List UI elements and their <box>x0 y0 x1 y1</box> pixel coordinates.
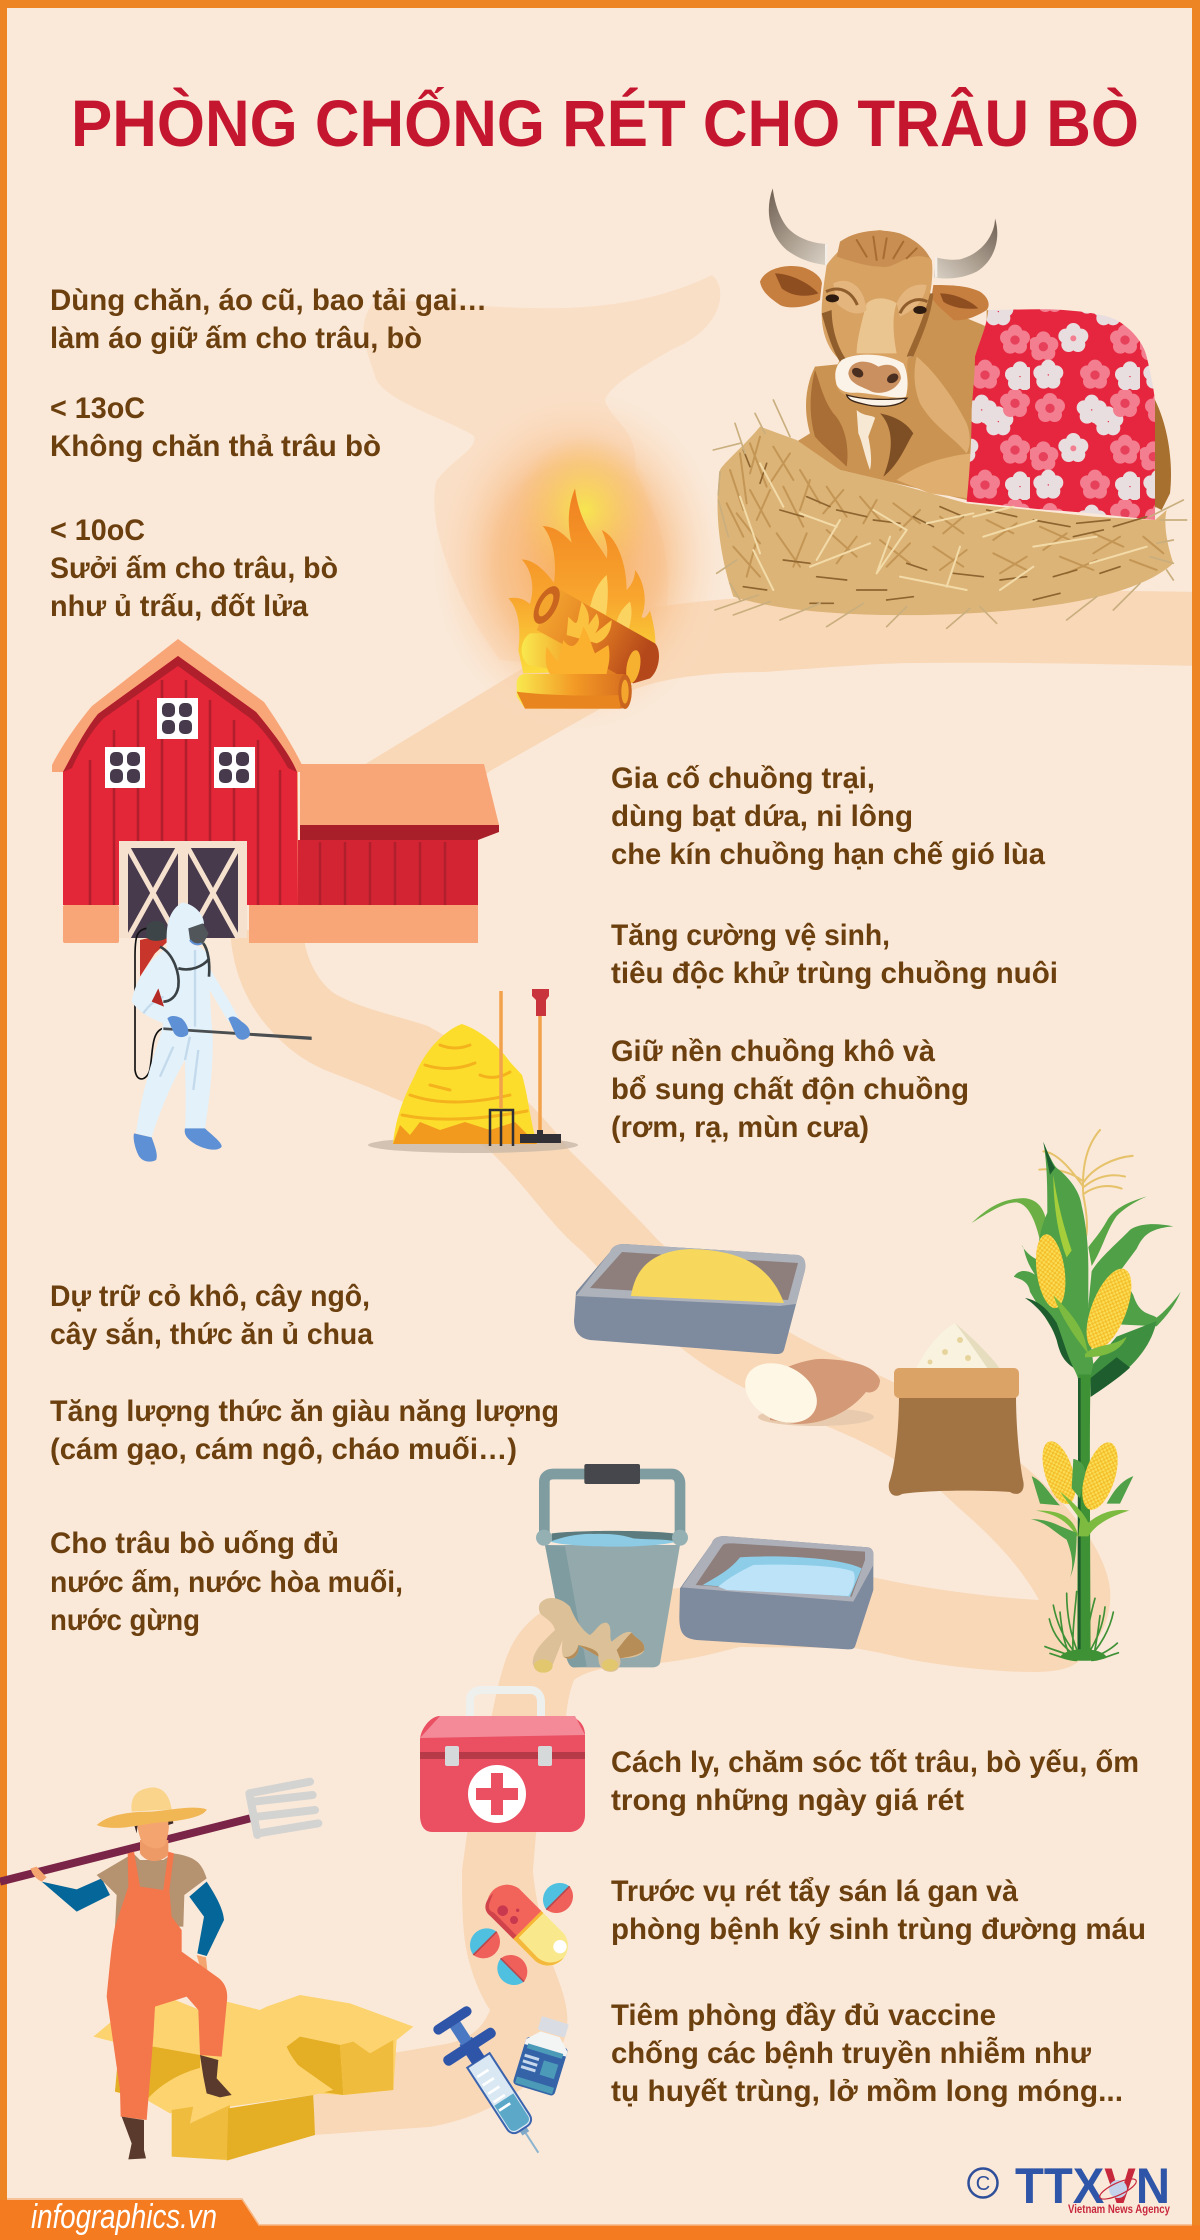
protective suit <box>132 903 238 1137</box>
text block: blankets and temperature: Dùng chăn, áo cũ, bao tải gai… <box>50 284 487 317</box>
neck and face <box>140 1840 168 1861</box>
illustration: hay pile with tools <box>368 989 578 1153</box>
windows <box>105 698 255 788</box>
text block: barn care: Tăng cường vệ sinh, <box>611 919 890 952</box>
illustration: pills <box>470 1883 573 1985</box>
text block: blankets and temperature: < 13oC <box>50 392 145 425</box>
text block: health care <box>611 1746 1146 2108</box>
boots <box>122 2117 146 2159</box>
text block: health care: trong những ngày giá rét <box>611 1784 964 1817</box>
pitchfork <box>499 991 503 1108</box>
text block: barn care: (rơm, rạ, mùn cưa) <box>611 1111 869 1144</box>
bottom site tag <box>0 2198 1200 2240</box>
illustration: red barn <box>52 639 499 943</box>
tassel <box>1039 1130 1133 1237</box>
text block: feed and water: nước gừng <box>50 1604 200 1637</box>
text block: health care: tụ huyết trùng, lở mồm long móng... <box>611 2075 1123 2108</box>
text block: blankets and temperature: Sưởi ấm cho trâu, bò <box>50 552 338 585</box>
text block: barn care: Giữ nền chuồng khô và <box>611 1035 935 1068</box>
lance <box>163 1027 312 1040</box>
winding path upper section <box>300 590 1200 830</box>
illustration: syringe <box>425 2000 563 2169</box>
fire glow <box>428 385 728 735</box>
text block: barn care <box>611 762 1058 1144</box>
text block: barn care: bổ sung chất độn chuồng <box>611 1073 969 1106</box>
hay nest <box>718 427 1173 615</box>
text block: health care: phòng bệnh ký sinh trùng đường máu <box>611 1913 1146 1946</box>
ginger <box>533 1598 644 1672</box>
text block: barn care: dùng bạt dứa, ni lông <box>611 800 913 833</box>
shovel handle and rake <box>538 1014 542 1132</box>
illustration: cow in hay with blanket <box>713 188 1187 628</box>
hat <box>131 1787 172 1812</box>
pitchfork <box>0 1818 250 1882</box>
corn cobs <box>1032 1232 1070 1310</box>
illustration: vaccine vial <box>512 2014 575 2096</box>
text block: feed and water: Dự trữ cỏ khô, cây ngô, <box>50 1280 370 1313</box>
blanket <box>967 309 1155 520</box>
illustration: corn plant <box>972 1130 1181 1661</box>
illustration: first aid kit <box>420 1690 585 1832</box>
illustration: campfire <box>508 435 659 709</box>
text block: feed and water: Cho trâu bò uống đủ <box>50 1527 339 1560</box>
text block: feed and water: cây sắn, thức ăn ủ chua <box>50 1317 373 1351</box>
text block: barn care: Gia cố chuồng trại, <box>611 762 875 795</box>
text block: blankets and temperature: làm áo giữ ấm cho trâu, bò <box>50 322 422 355</box>
sleeves <box>42 1878 110 1912</box>
illustration: water trough <box>679 1536 874 1649</box>
text block: health care: Cách ly, chăm sóc tốt trâu, bò yếu, ốm <box>611 1746 1139 1779</box>
text block: feed and water: Tăng lượng thức ăn giàu năng lượng <box>50 1395 559 1428</box>
smoke shape <box>363 275 720 670</box>
shirt <box>97 1853 207 1927</box>
text block: feed and water: nước ấm, nước hòa muối, <box>50 1566 403 1599</box>
logo: TTXVN: C <box>976 2173 990 2195</box>
text block: blankets and temperature: Không chăn thả trâu bò <box>50 430 381 463</box>
text block: health care: Trước vụ rét tẩy sán lá gan và <box>611 1875 1018 1908</box>
illustration: feed trough with yellow bran <box>574 1244 805 1354</box>
text block: feed and water <box>50 1280 559 1637</box>
text block: barn care: tiêu độc khử trùng chuồng nuôi <box>611 957 1058 990</box>
title: PHÒNG CHỐNG RÉT CHO TRÂU BÒ <box>71 86 1139 160</box>
upper leaves <box>972 1198 1047 1240</box>
text block: health care: Tiêm phòng đầy đủ vaccine <box>611 1999 996 2032</box>
logo: TTXVN: Vietnam News Agency <box>1068 2202 1170 2216</box>
text block: barn care: che kín chuồng hạn chế gió lùa <box>611 838 1045 871</box>
winding path lower section <box>230 930 1110 2135</box>
grass at base <box>1045 1591 1118 1660</box>
illustration: worker spraying disinfectant <box>132 903 312 1162</box>
text block: blankets and temperature: < 10oC <box>50 514 145 547</box>
door <box>119 841 247 938</box>
illustration: sack of bran <box>889 1323 1024 1496</box>
illustration: water bucket and ginger <box>533 1464 688 1673</box>
text block: health care: chống các bệnh truyền nhiễm như <box>611 2036 1091 2070</box>
barn body <box>52 639 302 905</box>
logo: TTXVN: TTXVN <box>1015 2158 1170 2214</box>
text block: blankets and temperature: như ủ trấu, đốt lửa <box>50 590 308 623</box>
logs <box>522 633 637 683</box>
text block: blankets and temperature <box>50 284 487 623</box>
illustration: hay bales <box>93 1995 413 2161</box>
flames <box>508 488 655 673</box>
stem <box>1077 1375 1091 1657</box>
illustration: farmer with pitchfork <box>0 1782 318 2159</box>
bottom site tag: infographics.vn <box>31 2198 217 2236</box>
text block: feed and water: (cám gạo, cám ngô, cháo muối…) <box>50 1433 517 1466</box>
overalls <box>107 1852 227 2120</box>
boots <box>134 1133 157 1162</box>
side building <box>249 840 478 943</box>
illustration: cassava <box>735 1351 880 1435</box>
